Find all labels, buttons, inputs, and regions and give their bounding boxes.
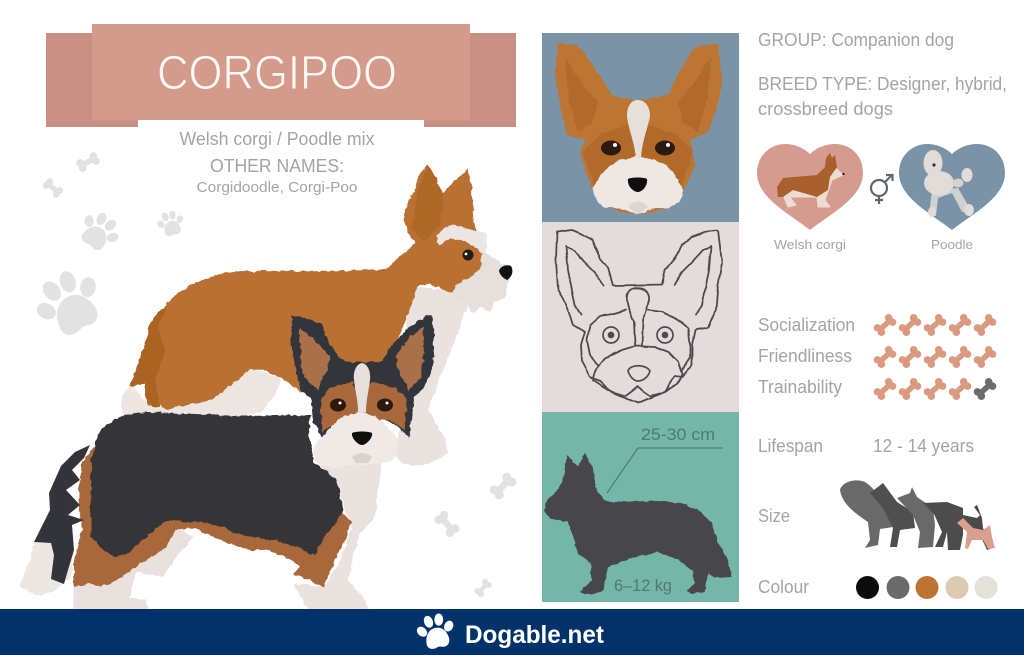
poodle icon [924,150,974,217]
row: Trainability: Trainability [758,377,842,397]
group text: GROUP: Companion dog [758,30,954,50]
cheek shading [582,125,636,190]
tan cheeks [320,382,407,432]
eyes [601,140,621,156]
subtitle text block: Corgidoodle, Corgi-Poo [196,179,358,196]
dog silhouette [544,453,732,595]
panel: head colour [542,33,739,222]
front leg and neck [294,450,382,613]
title banner [46,24,516,127]
subtitle text block [180,129,374,196]
colour swatches [856,576,998,599]
head [555,43,722,215]
black body [91,412,343,557]
blue heart [899,144,1005,230]
eyes [330,398,346,412]
parent: Poodle [899,144,1005,252]
row: Colour [758,576,998,599]
muzzle [593,156,683,215]
site name: Dogable.net [465,621,605,649]
inner ears [299,327,330,390]
white blaze [354,363,370,412]
darker shading on rump [130,304,167,408]
footer bar [0,609,1024,655]
nose [628,178,647,192]
black and tan corgipoo dog [19,314,434,613]
dark tail [34,445,90,584]
white rump and belly fur [122,368,281,418]
ear shading [412,165,444,243]
label: Poodle [931,237,973,252]
icon: paw logo [412,610,459,652]
row: Friendliness [758,344,998,370]
breed type text [758,74,1007,119]
rear leg [72,525,194,613]
corgi icon [777,153,845,207]
title: CORGIPOO [157,47,397,100]
row: Socialization: Socialization [758,315,855,335]
eyes and nose outline [603,327,673,381]
orange corgipoo dog [122,165,512,465]
subtitle text block: OTHER NAMES: [210,156,344,176]
breed type text: BREED TYPE: Designer, hybrid, [758,74,1007,94]
row: Lifespan: Lifespan [758,436,823,456]
background paws and bones [22,151,518,598]
parent: Welsh corgi [757,144,863,252]
rating bones [872,312,998,338]
white muzzle [313,412,397,468]
ears outer [291,314,434,439]
row: Lifespan: 12 - 14 years [873,436,974,456]
chin [352,453,372,463]
outline drawing [556,230,722,403]
subtitle text block: Welsh corgi / Poodle mix [180,129,374,149]
panel: silhouette with measurements [542,412,739,602]
row: Trainability [758,376,998,402]
row: Friendliness: Friendliness [758,346,852,366]
row: Socialization [758,312,998,338]
height line [607,448,723,493]
icon: male female symbol [871,175,892,204]
inner ears [565,57,598,132]
chin [628,202,648,214]
breed type text: crossbreed dogs [758,99,893,119]
tan markings [74,444,351,587]
row: Size [758,480,995,550]
orange dog eye [462,250,474,260]
white chest and front leg [392,287,468,465]
label: Welsh corgi [774,237,846,252]
size silhouettes [840,480,995,550]
rating bones [872,344,998,370]
height label: 25-30 cm [641,425,715,444]
rating bones [872,376,998,402]
panel: head outline [542,222,739,412]
nose [352,432,372,445]
orange body [130,165,484,410]
white forelock [436,225,487,256]
orange dog nose [499,265,512,280]
blaze [627,100,650,158]
row: Size: Size [758,506,790,526]
row: Lifespan [758,436,974,456]
white muzzle [452,250,510,314]
pink heart [757,144,863,230]
row: Colour: Colour [758,577,809,597]
weight label: 6–12 kg [614,576,672,595]
white tail fur [19,542,74,596]
